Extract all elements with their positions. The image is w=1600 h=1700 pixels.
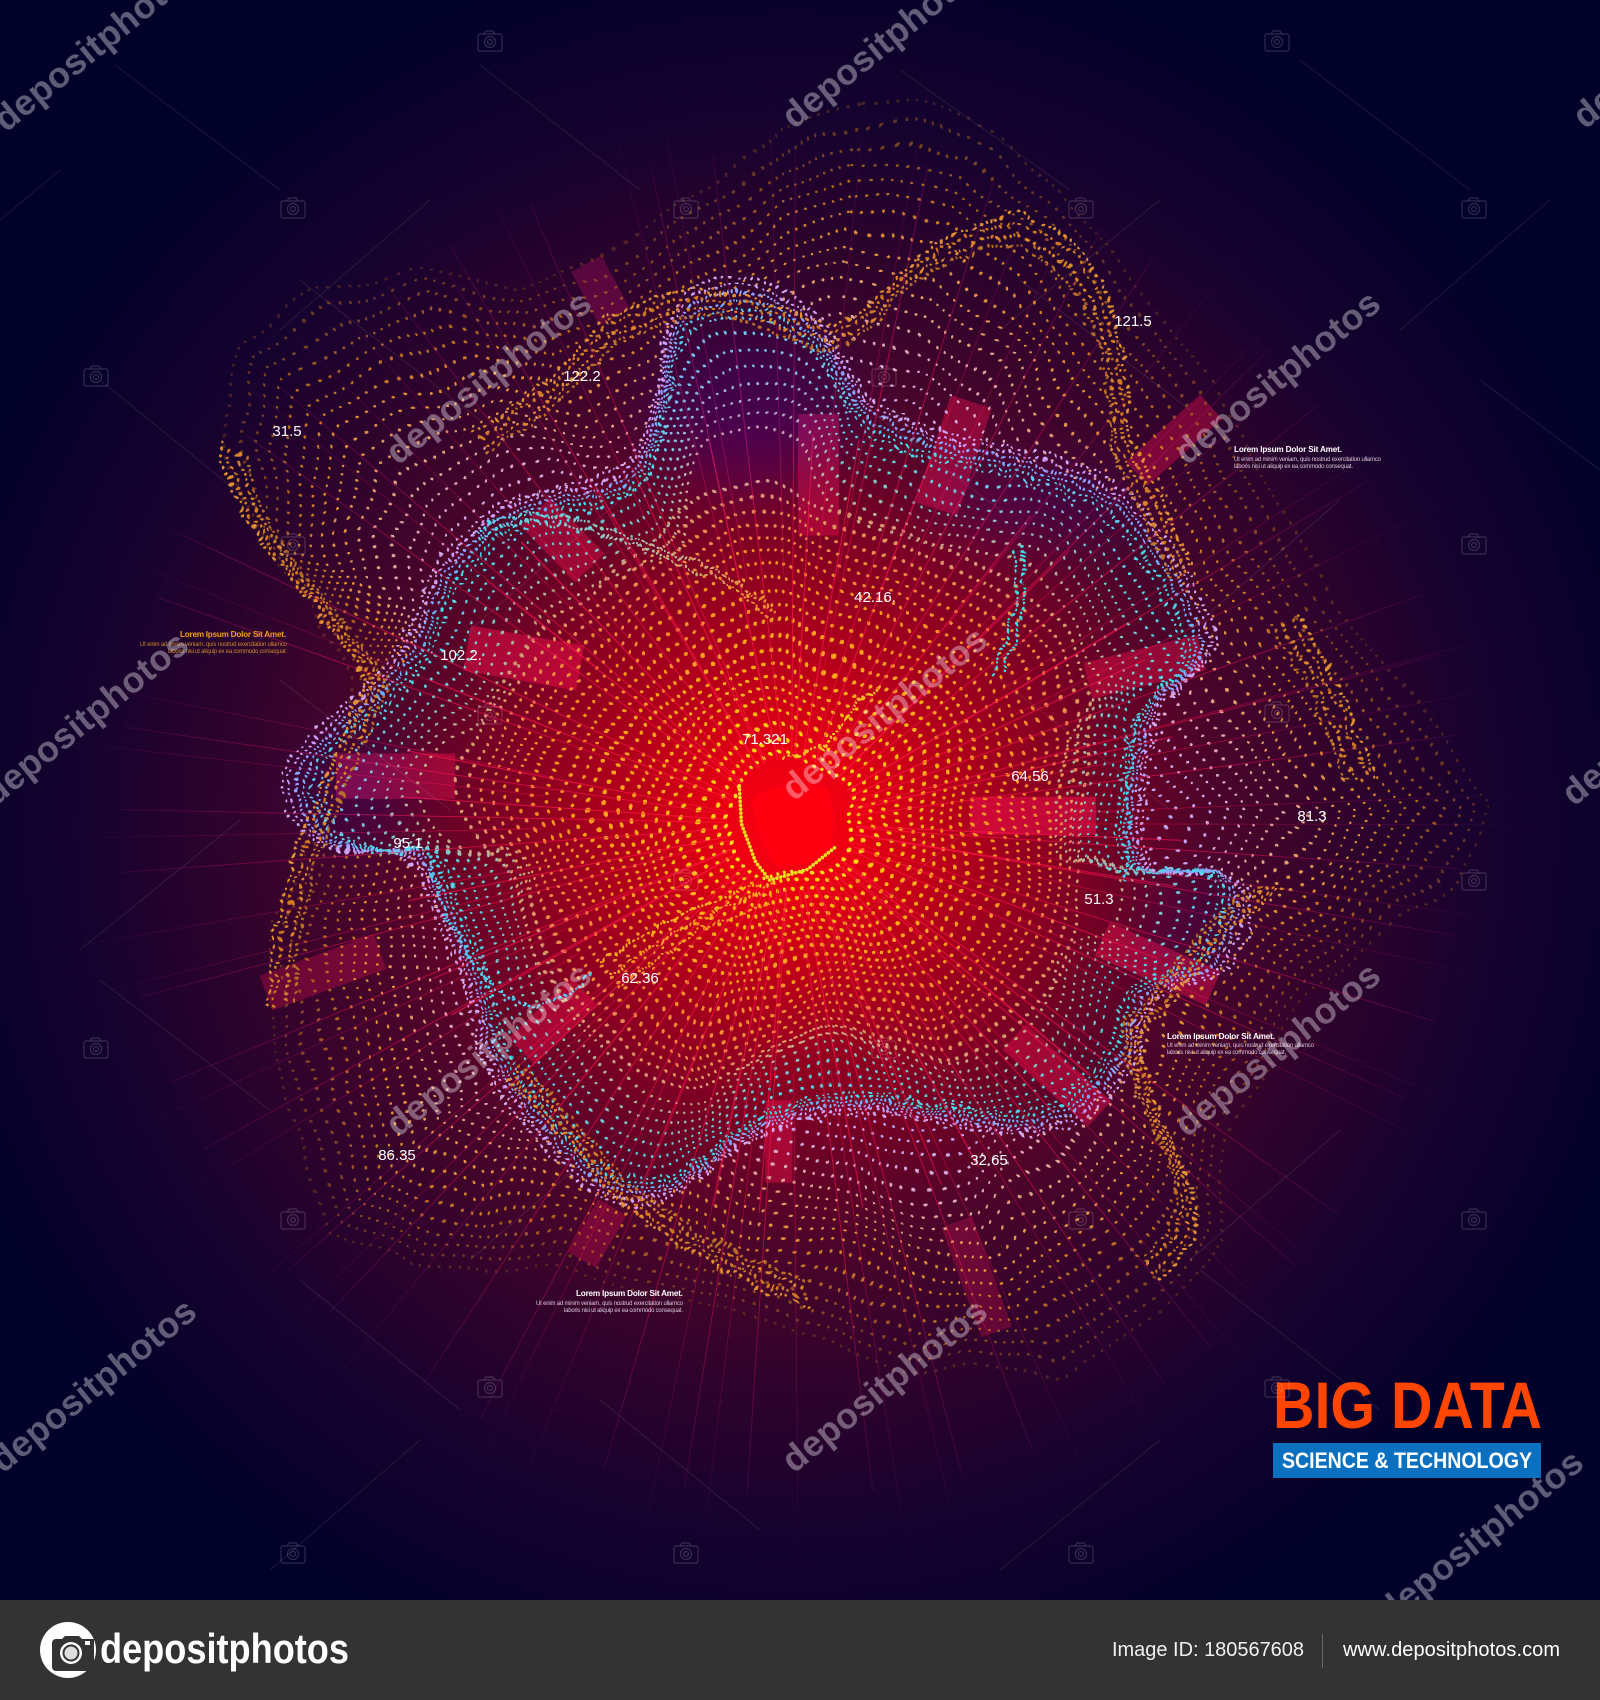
icon: camera logo bbox=[40, 1622, 96, 1678]
callout: lower right bbox=[1167, 1032, 1315, 1056]
red core with yellow edge bbox=[739, 785, 835, 880]
data value labels: 31.5 bbox=[272, 423, 302, 440]
data value labels: 62.36 bbox=[621, 970, 659, 987]
footer bar bbox=[0, 1600, 1600, 1700]
callout: upper right: Ut enim ad minim veniam, quis nostrud exercitation ullamco bbox=[1234, 457, 1382, 463]
data value labels: 95.1 bbox=[393, 835, 423, 852]
outer orange and lilac dot field bbox=[222, 103, 1496, 1377]
callout: left orange: Ut enim ad minim veniam, quis nostrud exercitation ullamco bbox=[140, 642, 288, 648]
cyan and orange inner folds bbox=[428, 514, 1136, 1004]
footer logo wordmark: depositphotos bbox=[100, 1625, 349, 1672]
callout: left orange: Lorem Ipsum Dolor Sit Amet. bbox=[180, 630, 286, 639]
data value labels: 102.2. bbox=[440, 647, 482, 664]
data value labels: 71.321 bbox=[742, 731, 788, 748]
data value labels: 86.35 bbox=[378, 1147, 416, 1164]
data value labels: 42.16. bbox=[854, 589, 896, 606]
dot fields bbox=[222, 103, 1496, 1377]
dense orange edge folds bbox=[219, 213, 1377, 1306]
watermark: repeated diagonal text and camera marks: depositphotos bbox=[1369, 1441, 1591, 1631]
data value labels: 32.65 bbox=[970, 1152, 1008, 1169]
callout: bottom: laboris nisi ut aliquip ex ea commodo consequat. bbox=[564, 1308, 683, 1314]
central data burst bbox=[219, 103, 1496, 1377]
watermark: repeated diagonal text and camera marks: depositphotos bbox=[377, 954, 599, 1144]
title: big data: BIG DATA bbox=[1273, 1368, 1542, 1442]
radial light rays bbox=[271, 304, 1312, 1344]
lilac tint over upper and left lobes bbox=[287, 320, 1236, 959]
data value labels: 81.3 bbox=[1297, 808, 1327, 825]
watermark: repeated diagonal text and camera marks: depositphotos bbox=[1166, 282, 1388, 472]
translucent radial data bars bbox=[260, 256, 1222, 1338]
callout: left orange: laboris nisi ut aliquip ex ea commodo consequat. bbox=[168, 649, 287, 655]
callout: lower right: Lorem Ipsum Dolor Sit Amet. bbox=[1167, 1032, 1275, 1041]
callout: upper right bbox=[1234, 445, 1382, 470]
callout: left orange bbox=[140, 630, 288, 655]
callout: lower right: Ut enim ad minim veniam, quis nostrud exercitation ullamco bbox=[1167, 1043, 1315, 1049]
callout: bottom bbox=[536, 1289, 684, 1314]
footer url: www.depositphotos.com bbox=[1342, 1639, 1560, 1661]
image id: Image ID: 180567608 bbox=[1112, 1639, 1304, 1661]
data value labels: 122.2 bbox=[563, 368, 601, 385]
watermark: repeated diagonal text and camera marks: depositphotos bbox=[773, 1290, 995, 1480]
callout: upper right: Lorem Ipsum Dolor Sit Amet. bbox=[1234, 445, 1342, 454]
subtitle badge: SCIENCE & TECHNOLOGY bbox=[1282, 1448, 1532, 1473]
callout: upper right: laboris nisi ut aliquip ex ea commodo consequat. bbox=[1234, 464, 1353, 470]
data value labels bbox=[272, 313, 1327, 1169]
data value labels: 121.5 bbox=[1114, 313, 1152, 330]
inner red haze bbox=[299, 295, 1236, 1192]
dense blue and lilac ring edge bbox=[282, 277, 1251, 1205]
inner dot rings from cyan edge to yellow core bbox=[329, 327, 1209, 1170]
subtitle badge bbox=[1273, 1443, 1541, 1478]
watermark: repeated diagonal text and camera marks: depositphotos bbox=[1166, 954, 1388, 1144]
data value labels: 64.56 bbox=[1011, 768, 1049, 785]
callout: lower right: laboris nisi ut aliquip ex ea commodo consequat. bbox=[1167, 1050, 1286, 1056]
callout: bottom: Lorem Ipsum Dolor Sit Amet. bbox=[576, 1289, 683, 1298]
callout: bottom: Ut enim ad minim veniam, quis nostrud exercitation ullamco bbox=[536, 1301, 684, 1307]
data value labels: 51.3 bbox=[1084, 891, 1114, 908]
watermark: repeated diagonal text and camera marks: depositphotos bbox=[773, 618, 995, 808]
watermark: repeated diagonal text and camera marks: depositphotos bbox=[377, 282, 599, 472]
